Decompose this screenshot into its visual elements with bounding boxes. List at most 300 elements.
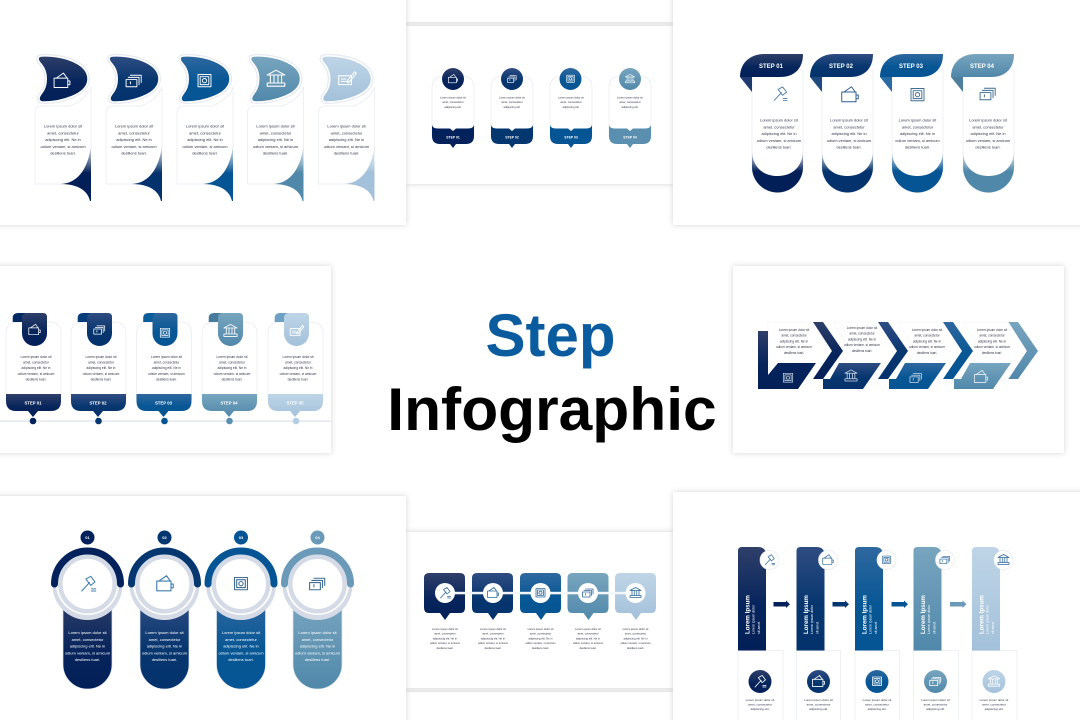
swoosh tail — [344, 145, 374, 201]
icon: bank — [267, 70, 285, 86]
body text: odium veniam, si amicum — [478, 641, 509, 645]
card 2 — [491, 68, 533, 148]
body text: Lorem ipsum dolor sit — [44, 124, 83, 128]
lower text: Lorem ipsum dolor sit — [746, 698, 774, 702]
body text: adipiscing elit. Ne in — [87, 366, 116, 370]
card body — [491, 76, 533, 136]
body text: Lorem ipsum dolor sit — [115, 124, 154, 128]
leaf outline — [322, 56, 372, 102]
tab — [87, 313, 112, 346]
icon badge — [936, 550, 954, 570]
body text: Lorem ipsum dolor sit — [68, 630, 108, 635]
tab fold — [78, 313, 91, 322]
card body — [177, 87, 233, 184]
white gap — [133, 552, 196, 615]
body text: desiliens tuari. — [905, 145, 930, 150]
body text: Lorem ipsum dolor sit — [912, 328, 942, 332]
chevron arrow — [1008, 322, 1038, 379]
bottom swoosh — [822, 150, 873, 192]
card 4 — [951, 54, 1014, 192]
tab — [152, 313, 178, 346]
body text: amet, consectetur — [285, 361, 312, 365]
body text: odium veniam, si amicum — [844, 343, 880, 347]
body text: desiliens tuari. — [91, 377, 111, 381]
top arc — [284, 551, 350, 584]
tab fold — [209, 313, 222, 322]
body text: Lorem ipsum dolor sit — [575, 627, 601, 631]
capsule — [216, 600, 266, 689]
panel background — [0, 266, 331, 453]
leaf outline — [180, 56, 230, 102]
capsule — [140, 600, 189, 689]
lower text: adipiscing elit. — [868, 707, 887, 711]
icon: safe — [235, 578, 247, 590]
step band — [550, 124, 592, 148]
tile 2 — [472, 573, 513, 650]
card 1 — [432, 68, 474, 148]
body text: odium veniam, si amicum — [776, 345, 812, 349]
ribbon fold — [740, 77, 752, 92]
title — [387, 302, 717, 443]
body text: odium veniam, si amicum — [525, 641, 556, 645]
card 5 — [268, 313, 323, 424]
lower text: amet, consectetur — [865, 702, 889, 706]
vertical heading: Lorem Ipsum — [744, 595, 752, 634]
body text: desiliens tuari. — [156, 377, 177, 381]
card body — [963, 70, 1014, 192]
body text: adipiscing elit. Ne in — [978, 339, 1006, 343]
body text: desiliens tuari. — [627, 646, 644, 650]
body text: Lorem ipsum dolor sit — [969, 118, 1008, 122]
tile 4 — [568, 573, 608, 650]
body text: odium veniam, si amicum — [148, 372, 185, 376]
step label: STEP 03 — [564, 136, 578, 140]
body text: odium veniam, si amicum — [142, 650, 188, 655]
icon: safe — [911, 89, 924, 101]
body text: amet, consectetur — [482, 632, 504, 636]
vertical bar — [738, 547, 766, 650]
card body — [35, 87, 91, 184]
body text: odium veniam, si amicum — [974, 345, 1010, 349]
body text: desiliens tuari. — [579, 646, 597, 650]
body text: adipiscing elit. Ne in — [831, 131, 867, 136]
card 3 — [880, 54, 943, 192]
step 4 — [954, 322, 1038, 389]
body text: adipiscing elit. Ne in — [329, 137, 364, 142]
body text: amet, consectetur — [972, 124, 1004, 129]
card body — [202, 322, 257, 400]
step label: STEP 04 — [970, 64, 995, 70]
icon: hammer — [755, 675, 766, 687]
body text: amet, consectetur — [189, 130, 222, 135]
panel background — [673, 0, 1080, 225]
body text: desiliens tuari. — [917, 351, 937, 355]
icon: safe — [783, 373, 793, 382]
body text: amet, consectetur — [914, 334, 941, 338]
card 3 — [177, 56, 233, 201]
body text: amet, consectetur — [763, 124, 795, 129]
lower text: amet, consectetur — [748, 702, 772, 706]
vertical text: Lorem ipsum dolor — [810, 604, 814, 634]
body text: adipiscing elit. Ne in — [284, 366, 313, 370]
card 2 — [106, 56, 162, 201]
panel: five leaf-shaped cards — [0, 0, 406, 225]
body text: odium veniam, si amicum — [895, 138, 940, 143]
vertical heading: Lorem Ipsum — [803, 595, 810, 634]
tile shape — [568, 573, 608, 620]
column 1 — [738, 547, 783, 720]
vertical heading: Lorem Ipsum — [920, 595, 927, 634]
white gap — [56, 552, 119, 615]
body text: adipiscing elit. Ne in — [913, 339, 941, 343]
icon: wallet — [29, 324, 40, 335]
body text: desiliens tuari. — [982, 351, 1002, 355]
icon: bank — [224, 324, 237, 336]
icon: cash — [126, 75, 141, 87]
inner ring — [137, 557, 192, 611]
icon: safe — [160, 328, 170, 337]
body text: Lorem ipsum dolor sit — [830, 118, 869, 122]
ribbon header — [880, 54, 943, 77]
vertical text: Lorem ipsum dolor — [868, 604, 872, 634]
icon: safe — [872, 677, 882, 686]
body text: amet, consectetur — [530, 632, 551, 636]
body text: adipiscing elit. — [445, 105, 462, 109]
body text: amet, consectetur — [833, 124, 865, 129]
swoosh tail — [202, 145, 233, 201]
body text: Lorem ipsum dolor sit — [480, 627, 506, 631]
body text: Lorem ipsum dolor sit — [20, 355, 52, 359]
body text: odium veniam, si amicum — [280, 372, 317, 376]
lower text: Lorem ipsum dolor sit — [980, 698, 1008, 702]
tab — [22, 313, 47, 346]
card body — [136, 322, 192, 400]
body text: amet, consectetur — [442, 100, 464, 104]
ribbon header — [740, 54, 803, 77]
body text: adipiscing elit. Ne in — [848, 337, 876, 341]
body text: odium veniam, si amicum — [218, 650, 264, 655]
icon badge — [760, 550, 779, 570]
body text: adipiscing elit. Ne in — [780, 339, 808, 343]
body text: Lorem ipsum dolor sit — [760, 118, 799, 122]
body text: adipiscing elit. Ne in — [223, 644, 259, 649]
vertical bar — [914, 547, 942, 650]
icon: wallet — [823, 555, 833, 564]
lower text: amet, consectetur — [982, 702, 1006, 706]
chevron arrow — [878, 322, 908, 379]
white gap — [286, 552, 349, 615]
unit 4 — [282, 530, 352, 689]
body text: odium veniam, si amicum — [18, 372, 55, 376]
ribbon header — [810, 54, 873, 77]
icon: cash — [930, 677, 941, 686]
body text: Lorem ipsum dolor sit — [298, 630, 338, 635]
panel background — [0, 0, 406, 225]
step 3 — [889, 322, 973, 389]
icon: wallet — [448, 74, 458, 83]
body text: amet, consectetur — [331, 130, 363, 135]
card body — [550, 76, 592, 136]
number badge — [234, 530, 248, 544]
top arc — [208, 551, 274, 584]
body text: desiliens tuari. — [836, 145, 862, 150]
base shape — [954, 363, 1011, 389]
step band — [609, 124, 651, 148]
body text: adipiscing elit. Ne in — [970, 131, 1006, 136]
tab fold — [143, 313, 156, 322]
leaf outline — [38, 56, 88, 102]
body text: odium veniam, si amicum — [214, 372, 251, 376]
lower text: amet, consectetur — [924, 702, 947, 706]
body text: adipiscing elit. Ne in — [45, 137, 81, 142]
body text: desiliens tuari. — [766, 145, 792, 150]
body text: desiliens tuari. — [334, 151, 359, 156]
card 5 — [318, 56, 374, 201]
tile badges and icons — [435, 583, 646, 603]
body text: desiliens tuari. — [532, 646, 549, 650]
body text: Lorem ipsum dolor sit — [327, 124, 366, 128]
body text: adipiscing elit. Ne in — [433, 636, 457, 640]
icon: bank — [625, 74, 635, 83]
panel: four ring capsules — [0, 496, 406, 720]
tab fold — [275, 313, 288, 322]
body text: desiliens tuari. — [305, 657, 330, 662]
ribbon fold — [951, 77, 963, 92]
body text: odium veniam, si amicum — [295, 650, 341, 655]
step band with pointer — [71, 394, 126, 417]
lower badge — [866, 670, 888, 693]
title line: Infographic: Infographic — [387, 375, 717, 443]
body text: Lorem ipsum dolor sit — [977, 328, 1007, 332]
number badge — [80, 530, 94, 544]
card 1 — [35, 56, 91, 201]
vertical text: sit amet — [874, 622, 878, 634]
lower text: adipiscing elit. — [985, 707, 1004, 711]
body text: amet, consectetur — [302, 637, 334, 642]
body text: amet, consectetur — [577, 632, 599, 636]
tab — [284, 313, 309, 346]
body text: amet, consectetur — [625, 632, 646, 636]
lower text: Lorem ipsum dolor sit — [863, 698, 892, 702]
timeline line — [0, 420, 331, 422]
body text: odium veniam, si amicum — [253, 144, 299, 149]
outer grey ring — [52, 550, 122, 620]
body text: desiliens tuari. — [852, 349, 872, 353]
panel: five vertical bars with arrows — [673, 492, 1080, 720]
panel background — [406, 26, 674, 184]
body text: adipiscing elit. Ne in — [761, 131, 797, 136]
number: 04 — [315, 535, 320, 540]
body text: amet, consectetur — [781, 334, 808, 338]
column 3 — [855, 547, 900, 720]
body text: amet, consectetur — [72, 637, 104, 642]
card 2 — [71, 313, 126, 424]
swoosh tail — [60, 145, 91, 201]
step band — [491, 124, 533, 148]
body text: adipiscing elit. — [504, 105, 521, 109]
white body — [833, 322, 897, 379]
body text: amet, consectetur — [560, 100, 582, 104]
body text: adipiscing elit. Ne in — [187, 137, 223, 142]
lower text: adipiscing elit. — [926, 707, 945, 711]
body text: odium veniam, si amicum — [111, 144, 157, 149]
unit 1 — [52, 530, 122, 689]
icon: bank — [845, 370, 857, 381]
card 4 — [202, 313, 257, 424]
panel: bottom centre pin tiles — [406, 532, 674, 688]
panel background — [406, 532, 674, 688]
body text: adipiscing elit. Ne in — [152, 366, 181, 370]
lower badge — [748, 670, 772, 693]
step label: STEP 04 — [623, 136, 637, 140]
body text: desiliens tuari. — [222, 377, 242, 381]
body text: odium veniam, si amicum — [573, 641, 604, 645]
icon: hammer — [774, 87, 787, 100]
unit 2 — [130, 530, 200, 689]
icon: cash — [980, 88, 995, 100]
body text: desiliens tuari. — [26, 377, 46, 381]
number: 02 — [162, 535, 167, 540]
tile 5 — [615, 573, 656, 650]
tile shape — [472, 573, 513, 620]
body text: desiliens tuari. — [975, 145, 1001, 150]
inner ring — [60, 557, 115, 611]
column 2 — [796, 547, 840, 720]
icon: wallet — [842, 87, 858, 102]
icon: cheque — [339, 72, 356, 85]
body text: Lorem ipsum dolor sit — [779, 328, 809, 332]
lower card — [972, 650, 1017, 720]
vertical text: Lorem ipsum dolor — [927, 604, 931, 634]
step label: STEP 02 — [505, 136, 519, 140]
body text: adipiscing elit. Ne in — [481, 636, 505, 640]
body text: adipiscing elit. Ne in — [116, 137, 152, 142]
bottom swoosh — [752, 150, 803, 192]
step label: STEP 04 — [220, 400, 238, 406]
body text: Lorem ipsum dolor sit — [216, 355, 248, 359]
card body — [892, 70, 943, 192]
tab fold — [13, 313, 26, 322]
leaf badge — [251, 56, 300, 102]
leaf badge — [38, 56, 88, 102]
card 4 — [248, 56, 304, 201]
white gap — [210, 552, 272, 615]
panel background — [733, 266, 1064, 453]
panel: chevron process — [733, 266, 1064, 453]
vertical heading: Lorem Ipsum — [862, 595, 868, 634]
vertical text: Lorem ipsum dolor — [986, 604, 990, 634]
timeline dot — [95, 418, 102, 424]
outer grey ring — [206, 550, 276, 620]
icon badge — [818, 550, 838, 570]
body text: Lorem ipsum dolor sit — [145, 630, 184, 635]
icon: cash — [940, 556, 950, 564]
leaf badge — [109, 56, 159, 102]
icon badge — [442, 68, 464, 90]
card 3 — [550, 68, 592, 148]
white body — [898, 322, 962, 379]
step label: STEP 03 — [155, 400, 173, 406]
body text: desiliens tuari. — [192, 151, 218, 156]
lower badge — [982, 670, 1006, 693]
icon: cash — [94, 326, 105, 334]
body text: Lorem ipsum dolor sit — [558, 96, 584, 100]
card body — [106, 87, 162, 184]
body text: adipiscing elit. Ne in — [900, 131, 935, 136]
card body — [752, 70, 803, 192]
lower text: Lorem ipsum dolor sit — [921, 698, 950, 702]
body text: Lorem ipsum dolor sit — [151, 355, 182, 359]
body text: desiliens tuari. — [152, 657, 177, 662]
body text: amet, consectetur — [902, 124, 934, 129]
card body — [432, 76, 474, 136]
body text: odium veniam, si amicum — [83, 372, 120, 376]
card body — [248, 87, 304, 184]
bottom swoosh — [963, 150, 1014, 192]
body text: adipiscing elit. — [622, 105, 639, 109]
body text: Lorem ipsum dolor sit — [499, 96, 525, 100]
body text: desiliens tuari. — [50, 151, 76, 156]
icon badge — [877, 550, 896, 570]
tile shape — [615, 573, 656, 620]
body text: amet, consectetur — [23, 361, 50, 365]
base shape — [758, 331, 816, 389]
step label: STEP 02 — [89, 400, 107, 406]
arrow 1 — [774, 600, 790, 608]
tile shape — [520, 573, 561, 620]
panel background — [673, 492, 1080, 720]
icon: bank — [998, 554, 1009, 564]
base shape — [823, 363, 881, 389]
body text: adipiscing elit. Ne in — [576, 636, 600, 640]
number: 01 — [85, 535, 90, 540]
body text: adipiscing elit. Ne in — [70, 644, 105, 649]
chevron arrow — [943, 322, 973, 379]
body text: Lorem ipsum dolor sit — [899, 118, 937, 122]
panel: four ribbon-top cards — [673, 0, 1080, 225]
body text: desiliens tuari. — [228, 657, 254, 662]
icon badge — [501, 68, 523, 90]
vertical bar — [972, 547, 1000, 650]
vertical bar — [796, 547, 824, 650]
vertical text: sit amet — [815, 622, 819, 634]
icon: hammer — [82, 576, 96, 591]
body text: odium veniam, si amicum — [620, 641, 651, 645]
body text: adipiscing elit. — [563, 105, 580, 109]
tile 1 — [424, 573, 465, 650]
body text: desiliens tuari. — [784, 351, 804, 355]
lower card — [796, 650, 840, 720]
body text: desiliens tuari. — [436, 646, 454, 650]
body text: amet, consectetur — [501, 100, 523, 104]
icon: cash — [507, 76, 516, 82]
body text: Lorem ipsum dolor sit — [528, 627, 554, 631]
body text: odium veniam, si amicum — [324, 144, 370, 149]
vertical heading: Lorem Ipsum — [978, 595, 986, 634]
body text: adipiscing elit. Ne in — [624, 636, 648, 640]
timeline dot — [293, 418, 299, 424]
card 2 — [810, 54, 873, 192]
outer grey ring — [282, 550, 352, 620]
card body — [268, 322, 323, 400]
white body — [963, 322, 1027, 379]
body text: odium veniam, si amicum — [827, 138, 872, 143]
body text: amet, consectetur — [149, 637, 181, 642]
top arc — [132, 551, 198, 584]
tab — [218, 313, 243, 346]
body text: Lorem ipsum dolor sit — [432, 627, 458, 631]
body text: odium veniam, si amicum — [966, 138, 1011, 143]
